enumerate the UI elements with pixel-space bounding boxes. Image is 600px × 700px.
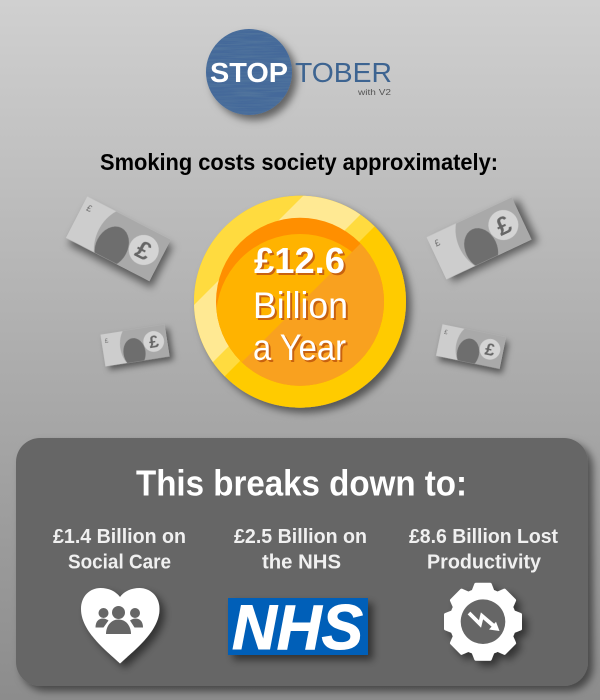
banknote: top left: £	[131, 235, 156, 267]
NHS label: the NHS	[262, 552, 341, 574]
social care label: Social Care	[68, 552, 171, 574]
banknote: top left: £	[85, 203, 94, 214]
panel background	[16, 438, 588, 686]
panel heading: This breaks down to:	[136, 462, 467, 504]
logo disc	[206, 29, 292, 115]
coin amount text: Billion	[253, 285, 348, 326]
productivity label	[409, 526, 558, 574]
icon: gear with falling arrow	[446, 584, 520, 659]
coin rim highlight	[194, 196, 374, 376]
banknote: bottom right	[435, 324, 507, 374]
banknote: top left	[62, 196, 172, 288]
coin amount text: a Year	[253, 327, 346, 368]
column: NHS	[228, 526, 368, 663]
icon: NHS logo: NHS	[232, 593, 363, 663]
coin amount text: £12.6	[256, 242, 347, 283]
NHS label: £2.5 Billion on	[234, 526, 367, 548]
coin amount text	[253, 240, 350, 370]
banknote: top right: £	[433, 237, 442, 249]
banknote: bottom left: £	[147, 331, 160, 352]
logo: Stoptober with V2	[206, 29, 392, 115]
banknote: top right: £	[492, 210, 516, 242]
icon: heart with people	[81, 588, 160, 664]
banknote: bottom right: £	[483, 339, 497, 360]
logo word STOP: STOP	[210, 57, 288, 88]
coin inner dark crescent	[216, 218, 384, 386]
coin inner face	[216, 234, 384, 386]
logo word TOBER: TOBER	[295, 57, 392, 88]
banknote: top right	[426, 196, 536, 286]
gold coin	[194, 196, 416, 418]
banknote: bottom left: £	[104, 337, 109, 345]
coin amount text: Billion	[255, 287, 350, 328]
logo tagline: with V2	[357, 87, 391, 97]
NHS label	[234, 526, 367, 574]
banknote: bottom left	[100, 324, 171, 372]
coin amount text: a Year	[255, 329, 348, 370]
productivity label: £8.6 Billion Lost	[409, 526, 558, 548]
heading: smoking costs: Smoking costs society approximately:	[100, 149, 498, 175]
coin amount text: £12.6	[254, 240, 345, 281]
banknote: bottom right: £	[443, 329, 449, 336]
coin base	[194, 196, 406, 408]
productivity label: Productivity	[427, 552, 542, 574]
column: social care	[53, 526, 186, 664]
column: lost productivity	[409, 526, 558, 659]
social care label	[53, 526, 186, 574]
social care label: £1.4 Billion on	[53, 526, 186, 548]
panel: breakdown	[16, 438, 588, 686]
